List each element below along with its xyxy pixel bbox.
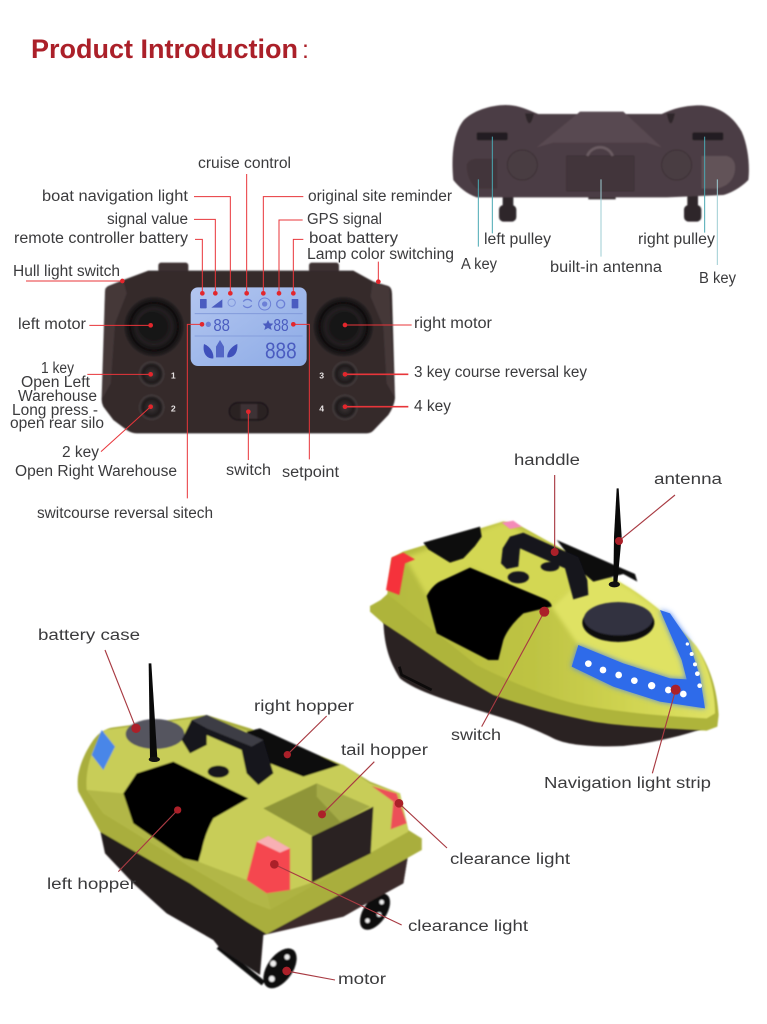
- handle: [182, 715, 273, 785]
- LCD boat hoppers icon: [204, 340, 237, 358]
- controller labels: open rear silo: [10, 415, 104, 432]
- status icons: [200, 298, 298, 310]
- controller labels: switcourse reversal sitech: [37, 505, 213, 522]
- boat rear labels: left hopper: [47, 876, 136, 893]
- controller labels: remote controller battery: [14, 230, 188, 247]
- tail hopper: [263, 783, 370, 837]
- controller body: [102, 271, 395, 433]
- stern wall: [263, 853, 408, 935]
- controller labels: setpoint: [282, 464, 340, 481]
- antenna: [149, 663, 160, 762]
- right rear propeller: [354, 888, 396, 935]
- controller labels: Lamp color switching: [307, 246, 454, 263]
- boat rear labels: tail hopper: [341, 742, 428, 759]
- boat rear labels: clearance light: [450, 851, 571, 868]
- key numbers: 1: [171, 371, 176, 381]
- hatch knobs: [508, 562, 559, 583]
- LEDs: [585, 642, 702, 697]
- boat rear labels: battery case: [38, 627, 140, 644]
- boat rear labels: motor: [338, 971, 386, 988]
- key numbers: 3: [319, 371, 324, 381]
- controller labels: Open Right Warehouse: [15, 463, 177, 480]
- boat front labels: [451, 452, 722, 792]
- controller labels: original site reminder: [308, 188, 452, 205]
- boat front view: [370, 475, 719, 773]
- key numbers: 4: [319, 403, 324, 413]
- keys 1 to 4: [139, 361, 358, 420]
- boat front labels: switch: [451, 727, 501, 744]
- nose plateau: [552, 568, 688, 678]
- remote controller rear view: [453, 105, 749, 265]
- navigation light strip: [572, 610, 705, 708]
- boat rear labels: right hopper: [254, 698, 354, 715]
- clearance light red: [386, 553, 415, 595]
- battery disk: [582, 602, 654, 642]
- left joystick: [124, 297, 184, 357]
- handle: [501, 533, 588, 599]
- controller labels: 4 key: [414, 398, 451, 415]
- centre ridge: [537, 112, 662, 147]
- key numbers: 2: [171, 403, 176, 413]
- hull bracket: [399, 667, 432, 690]
- rear view labels: right pulley: [638, 231, 715, 248]
- clearance light pink: [502, 521, 522, 529]
- rear view labels: built-in antenna: [550, 259, 662, 276]
- blue side light: [92, 730, 115, 770]
- left wall: [87, 790, 270, 909]
- key numbers: [171, 371, 324, 413]
- blue strip glow: [572, 610, 705, 708]
- back hopper: [423, 527, 482, 563]
- teal leader lines: [478, 137, 717, 265]
- boat front labels: antenna: [654, 471, 722, 488]
- controller labels: 1 key: [41, 360, 74, 377]
- left rear propeller: [257, 942, 303, 994]
- left hopper: [427, 568, 552, 660]
- right hopper: [557, 540, 637, 582]
- boat leader lines: [482, 475, 681, 773]
- back deck plateau: [405, 523, 593, 607]
- controller labels: left motor: [18, 316, 86, 333]
- boat front labels: handdle: [514, 452, 580, 469]
- controller labels: signal value: [107, 211, 188, 228]
- controller labels: [10, 155, 587, 522]
- battery disk: [126, 719, 184, 749]
- controller labels: Hull light switch: [13, 263, 120, 280]
- right hopper: [247, 728, 340, 777]
- controller labels: 2 key: [62, 444, 99, 461]
- LCD small readouts: 88: [273, 315, 289, 335]
- propeller arm: [218, 947, 263, 983]
- boat rear labels: clearance light: [408, 918, 529, 935]
- lower hull: [383, 620, 707, 746]
- boat rear view: [77, 650, 447, 994]
- controller labels: Long press -: [12, 402, 98, 419]
- boat rear labels: [38, 627, 571, 988]
- rear details: [467, 113, 735, 191]
- LCD small readouts: [206, 315, 297, 363]
- rear stick knobs: [499, 195, 701, 222]
- rear view labels: [461, 231, 736, 287]
- deck top: [86, 717, 408, 909]
- rear body: [453, 105, 749, 197]
- boat leader lines: [105, 650, 447, 980]
- controller labels: Open Left: [21, 374, 91, 391]
- controller labels: switch: [226, 462, 271, 479]
- tail hopper inner wall: [317, 783, 370, 822]
- hatch knob: [208, 766, 229, 778]
- left hopper: [123, 762, 248, 862]
- controller labels: boat battery: [309, 230, 398, 247]
- hull side and nose: [387, 522, 715, 718]
- boat front labels: Navigation light strip: [544, 775, 711, 792]
- controller labels: right motor: [414, 315, 492, 332]
- right joystick: [313, 297, 373, 357]
- controller labels: boat navigation light: [42, 188, 189, 205]
- deck flange: [370, 522, 719, 731]
- LCD screen: [191, 287, 307, 366]
- centre switch: [229, 403, 268, 420]
- rear view labels: B key: [699, 270, 736, 287]
- right clearance light: [372, 786, 407, 829]
- rear view labels: left pulley: [484, 231, 551, 248]
- deck flange: [77, 715, 422, 934]
- controller labels: Warehouse: [18, 388, 97, 405]
- lower hull: [100, 830, 408, 975]
- antenna: [609, 488, 622, 587]
- side grips: [102, 281, 394, 398]
- red leader lines: [26, 174, 412, 498]
- controller labels: GPS signal: [307, 211, 382, 228]
- remote controller front view: [26, 174, 412, 498]
- stern wall upper: [267, 832, 408, 909]
- LCD small readouts: 88: [213, 315, 230, 335]
- LCD small readouts: 888: [265, 337, 297, 363]
- left clearance light top: [257, 836, 290, 853]
- controller labels: cruise control: [198, 155, 291, 172]
- title: :: [302, 36, 309, 64]
- controller labels: 3 key course reversal key: [414, 364, 587, 381]
- handle top face: [192, 715, 263, 747]
- tail plate: [312, 807, 373, 883]
- left clearance light: [247, 836, 290, 893]
- title: Product Introduction: [31, 34, 298, 64]
- rear view labels: A key: [461, 256, 497, 273]
- top shoulder knobs: [158, 263, 339, 273]
